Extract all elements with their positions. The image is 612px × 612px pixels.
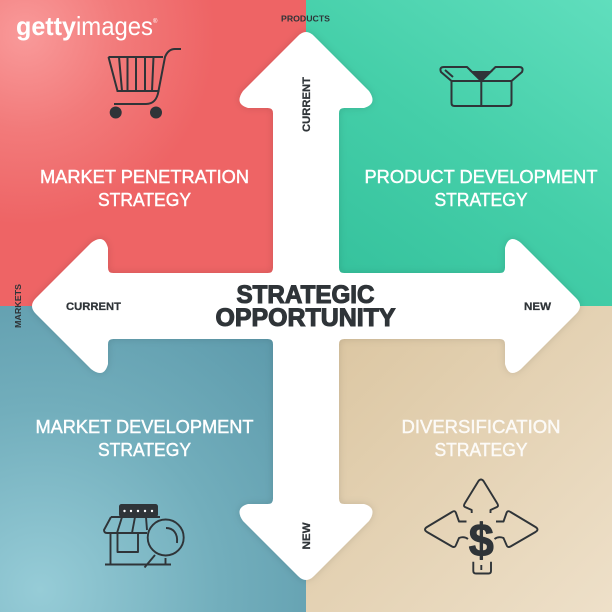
- axis label: markets: MARKETS: [13, 284, 23, 328]
- heading: market penetration strategy: STRATEGY: [98, 189, 191, 210]
- panel: market development background: [0, 306, 306, 612]
- heading: product development strategy: [364, 166, 598, 210]
- icon: dollar with four arrows: $: [469, 514, 494, 566]
- heading: market development strategy: [36, 416, 254, 460]
- title: strategic opportunity: [216, 281, 396, 332]
- icon: open box: [440, 67, 523, 106]
- heading: market penetration strategy: MARKET PENETRATION: [40, 166, 249, 187]
- icon: shopping cart: [108, 49, 181, 118]
- heading: product development strategy: PRODUCT DEVELOPMENT: [364, 166, 598, 187]
- heading: diversification strategy: STRATEGY: [434, 439, 528, 460]
- watermark: getty images logo: getty: [16, 11, 77, 41]
- heading: diversification strategy: [402, 416, 560, 460]
- panel: diversification background: [306, 306, 612, 612]
- heading: diversification strategy: DIVERSIFICATION: [402, 416, 560, 437]
- title: strategic opportunity: OPPORTUNITY: [216, 304, 396, 332]
- icon: storefront with magnifier: [104, 504, 184, 568]
- title: strategic opportunity: STRATEGIC: [236, 281, 374, 309]
- watermark: getty images logo: images: [76, 11, 153, 41]
- watermark: getty images logo: ®: [153, 18, 158, 25]
- heading: market penetration strategy: [40, 166, 249, 210]
- axis label: products: PRODUCTS: [281, 14, 330, 24]
- heading: product development strategy: STRATEGY: [434, 189, 528, 210]
- icon: dollar with four arrows: [425, 480, 538, 574]
- arrow label: new (right): NEW: [524, 301, 552, 313]
- heading: market development strategy: MARKET DEVELOPMENT: [36, 416, 254, 437]
- panel: product development background: [306, 0, 612, 306]
- panel: market penetration background: [0, 0, 306, 306]
- arrow label: current (top): CURRENT: [301, 77, 313, 132]
- arrow label: new (bottom): NEW: [301, 522, 313, 550]
- arrow label: current (left): CURRENT: [66, 301, 121, 313]
- watermark: getty images logo: [16, 11, 158, 41]
- heading: market development strategy: STRATEGY: [98, 439, 191, 460]
